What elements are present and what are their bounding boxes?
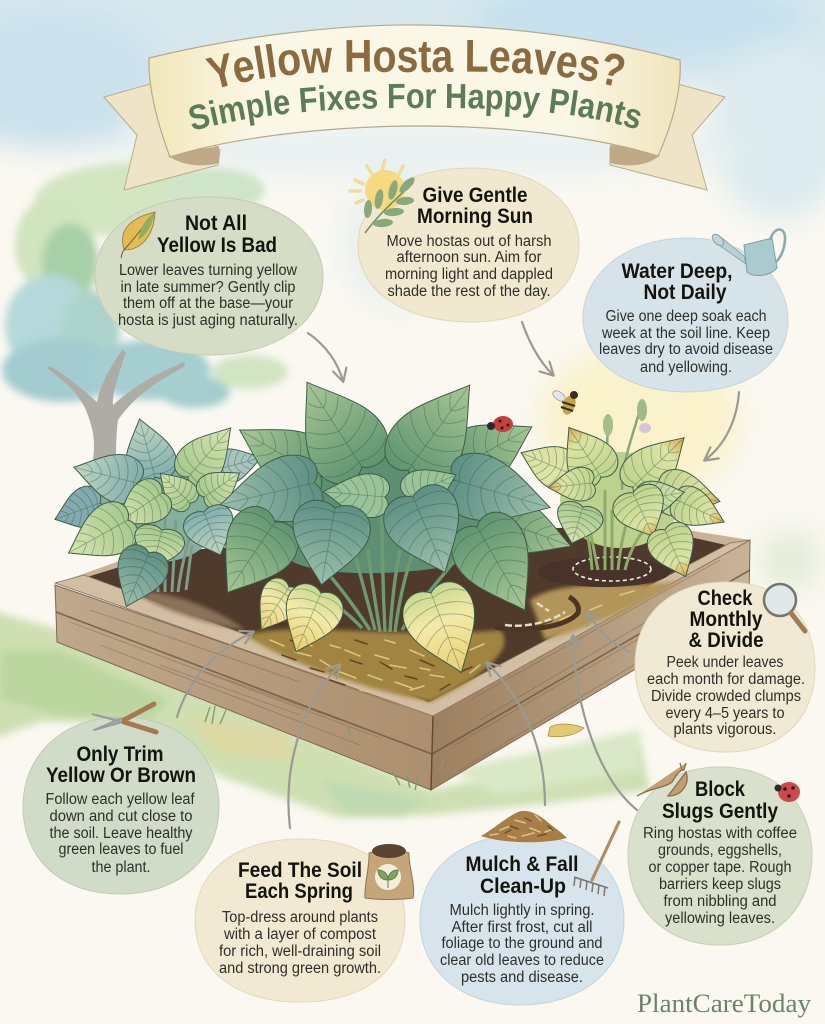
heading: Not All bbox=[185, 211, 247, 235]
heading: & Divide bbox=[688, 628, 764, 652]
left wooden side bbox=[55, 585, 433, 790]
raised wooden bed bbox=[55, 510, 750, 790]
grass tufts bbox=[205, 706, 444, 790]
heading bbox=[46, 742, 196, 787]
body text: grounds, eggshells, bbox=[658, 842, 782, 859]
title banner bbox=[104, 25, 725, 190]
body text: Give one deep soak each bbox=[606, 308, 766, 325]
tree foliage bbox=[2, 162, 288, 408]
top rim bbox=[55, 540, 750, 716]
body text bbox=[46, 791, 195, 876]
arrow: trim to yellow leaves bbox=[177, 632, 253, 717]
arrow: morning sun to plant bbox=[522, 322, 553, 375]
body text: week at the soil line. Keep bbox=[601, 325, 770, 342]
body text: Ring hostas with coffee bbox=[643, 825, 797, 842]
body text: After first frost, cut all bbox=[452, 919, 592, 936]
heading: Each Spring bbox=[245, 879, 353, 903]
banner left tail bbox=[104, 84, 220, 190]
heading bbox=[622, 259, 732, 304]
heading: Yellow Or Brown bbox=[46, 763, 196, 787]
upper leaves bbox=[213, 360, 580, 572]
body text: green leaves to fuel bbox=[58, 841, 184, 858]
body text bbox=[118, 262, 298, 329]
icon: mulch pile bbox=[481, 811, 567, 842]
arrow: not all yellow to plant bbox=[308, 333, 343, 381]
body text: in late summer? Gently clip bbox=[120, 279, 296, 296]
heading: Water Deep, bbox=[622, 259, 732, 283]
heading: Monthly bbox=[690, 607, 763, 631]
body text: Peek under leaves bbox=[666, 654, 784, 671]
heading: Clean-Up bbox=[480, 874, 566, 898]
body text: from nibbling and bbox=[664, 893, 776, 910]
body text: plants vigorous. bbox=[674, 721, 776, 738]
body text: with a layer of compost bbox=[223, 926, 377, 943]
arrow: water to plant bbox=[705, 392, 739, 460]
central stems bbox=[312, 510, 455, 632]
body text: morning light and dappled bbox=[385, 266, 553, 283]
banner right tail bbox=[610, 84, 725, 190]
brand logo text: PlantCareToday bbox=[637, 989, 811, 1018]
body text: the soil. Leave healthy bbox=[50, 825, 193, 842]
icon: watering can bbox=[710, 230, 785, 275]
icon: rake bbox=[574, 822, 619, 896]
body text: hosta is just aging naturally. bbox=[118, 312, 298, 329]
panel: Feed The Soil Each Spring bbox=[195, 839, 414, 1002]
body text: Top-dress around plants bbox=[222, 909, 378, 926]
body text: yellowing leaves. bbox=[665, 910, 775, 927]
heading: Check bbox=[698, 586, 753, 610]
heading: Give Gentle bbox=[422, 183, 528, 207]
icon: pruning shears bbox=[92, 704, 156, 732]
body text: Lower leaves turning yellow bbox=[119, 262, 298, 279]
body text: Follow each yellow leaf bbox=[46, 791, 195, 808]
body text: and yellowing. bbox=[640, 359, 732, 376]
panel: Check Monthly & Divide bbox=[635, 582, 815, 752]
arrow: mulch to bed bbox=[487, 663, 545, 805]
body text: Mulch lightly in spring. bbox=[450, 902, 594, 919]
fallen leaf on grass bbox=[548, 724, 584, 737]
heading bbox=[417, 183, 533, 228]
body text: Divide crowded clumps bbox=[651, 688, 801, 705]
central hosta plant bbox=[198, 360, 580, 685]
heading bbox=[662, 777, 778, 823]
body text: and strong green growth. bbox=[219, 960, 381, 977]
icon: yellow leaf bbox=[121, 212, 155, 258]
body text: every 4–5 years to bbox=[666, 705, 784, 722]
icon: sun rays bbox=[350, 160, 403, 203]
heading bbox=[157, 211, 277, 257]
panel: Give Gentle Morning Sun bbox=[350, 160, 579, 322]
body text: shade the rest of the day. bbox=[388, 283, 550, 300]
right wooden side bbox=[431, 540, 750, 790]
right yellowing hosta plant bbox=[513, 399, 732, 586]
body text: pests and disease. bbox=[461, 969, 583, 986]
arrow: slugs to bed bbox=[573, 636, 637, 810]
back rim bbox=[560, 510, 750, 546]
body text: clear old leaves to reduce bbox=[440, 952, 604, 969]
body text: each month for damage. bbox=[647, 671, 805, 688]
panel: Block Slugs Gently bbox=[628, 763, 812, 945]
body text: them off at the base—your bbox=[123, 295, 293, 312]
body text bbox=[647, 654, 805, 738]
banner main ribbon bbox=[149, 25, 680, 157]
heading bbox=[466, 852, 578, 898]
background tree bbox=[2, 162, 288, 465]
icon: ladybug on leaf bbox=[487, 416, 513, 432]
grass under the bed bbox=[0, 610, 650, 818]
left hosta plant bbox=[48, 412, 266, 616]
body text: leaves dry to avoid disease bbox=[599, 341, 773, 358]
icon: magnifier bbox=[764, 584, 805, 631]
heading: Not Daily bbox=[644, 280, 727, 304]
soil bbox=[84, 522, 730, 708]
body text bbox=[385, 233, 553, 300]
heading: Block bbox=[695, 777, 745, 801]
icon: slug bbox=[637, 763, 687, 796]
icon: ladybug bbox=[774, 782, 800, 802]
arrow: feed soil to bed bbox=[288, 665, 340, 828]
plank seams and grain bbox=[56, 570, 750, 754]
body text: or copper tape. Rough bbox=[648, 859, 792, 876]
icon: bee bbox=[551, 389, 578, 416]
yellow lower leaves bbox=[244, 573, 495, 685]
panel: Water Deep, Not Daily bbox=[583, 230, 788, 392]
panel: Only Trim Yellow Or Brown bbox=[23, 704, 219, 894]
body text bbox=[440, 902, 604, 986]
body text: down and cut close to bbox=[50, 808, 192, 825]
heading: Yellow Is Bad bbox=[157, 233, 277, 257]
body text: foliage to the ground and bbox=[442, 935, 602, 952]
mulch layer bbox=[130, 580, 680, 702]
heading: Mulch & Fall bbox=[466, 852, 578, 876]
body text: for rich, well-draining soil bbox=[219, 943, 381, 960]
title line 2: Simple Fixes For Happy Plants bbox=[189, 84, 640, 130]
body text bbox=[219, 909, 381, 977]
body text bbox=[599, 308, 773, 376]
body text bbox=[643, 825, 797, 927]
panel: Mulch & Fall Clean-Up bbox=[420, 811, 624, 1005]
heading: Only Trim bbox=[76, 742, 164, 766]
body text: afternoon sun. Aim for bbox=[396, 249, 542, 266]
icon: compost sack bbox=[365, 844, 414, 900]
arrows bbox=[177, 322, 739, 828]
slug trail and damage ring bbox=[495, 557, 670, 629]
body text: barriers keep slugs bbox=[659, 876, 781, 893]
arrow: check monthly to bed bbox=[588, 612, 630, 652]
icon: sun and sprig bbox=[363, 170, 417, 233]
tree trunk and branches bbox=[47, 350, 185, 465]
title line 1: Yellow Hosta Leaves? bbox=[205, 40, 624, 88]
body text: Move hostas out of harsh bbox=[386, 233, 552, 250]
front leaves bbox=[198, 478, 557, 629]
heading bbox=[238, 858, 362, 903]
body text: the plant. bbox=[92, 859, 150, 876]
heading: Feed The Soil bbox=[238, 858, 362, 882]
heading: Slugs Gently bbox=[662, 799, 778, 823]
heading: Morning Sun bbox=[417, 204, 533, 228]
heading bbox=[688, 586, 764, 652]
flower buds bbox=[603, 399, 651, 436]
panel: Not All Yellow Is Bad bbox=[95, 197, 323, 355]
